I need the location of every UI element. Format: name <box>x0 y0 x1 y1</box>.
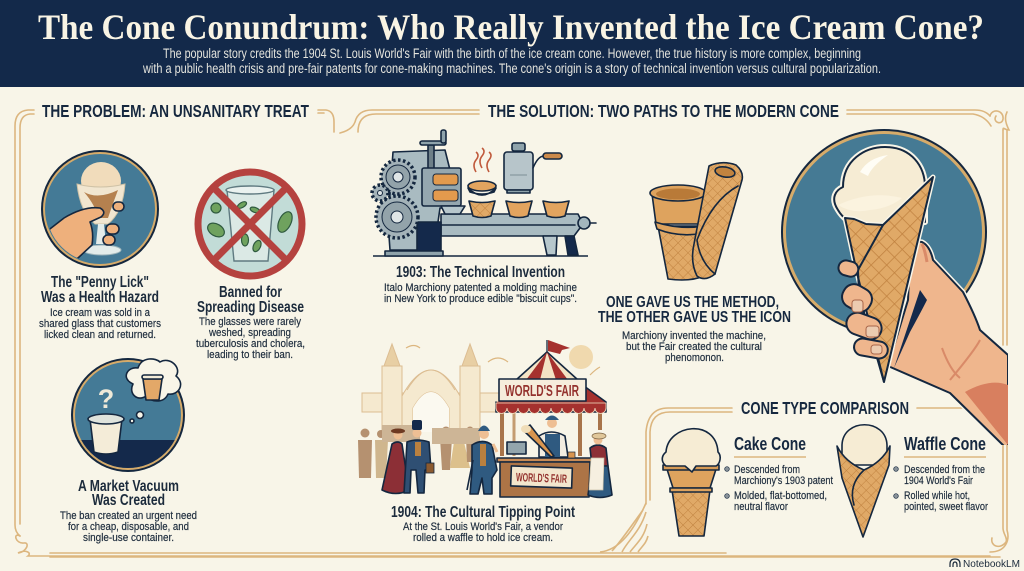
scoop <box>834 147 925 228</box>
text: waffle cone: Waffle Cone <box>904 434 986 454</box>
text: waffle cone <box>894 434 988 513</box>
text: penny lick: Was a Health Hazard <box>41 289 159 306</box>
panel: the problem <box>39 101 309 544</box>
text: penny lick: shared glass that customers <box>39 318 161 330</box>
hand back <box>902 239 966 408</box>
text: 1904 tipping point <box>391 504 575 544</box>
icon: banned germ glass <box>198 172 302 276</box>
counter sign: WORLD'S FAIR <box>516 470 567 486</box>
text: banned for spreading disease <box>196 284 305 361</box>
icon: cake cone <box>662 429 720 536</box>
cone <box>845 177 933 382</box>
text: market vacuum: single-use container. <box>83 532 174 544</box>
text: 1904 tipping point: 1904: The Cultural Tipping Point <box>391 504 575 521</box>
text: cake cone: Cake Cone <box>734 434 806 454</box>
text: 1903 invention <box>384 264 577 305</box>
text: method and icon: Marchiony invented the machine, <box>622 330 766 342</box>
text: 1903 invention: Italo Marchiony patented a molding machine <box>384 282 577 294</box>
text: banned for spreading disease: weshed, spreading <box>208 327 291 339</box>
icon: market vacuum cup and thought bubble: ? <box>98 384 114 414</box>
gate <box>362 344 500 432</box>
text: banned for spreading disease: Banned for <box>219 284 282 301</box>
text: waffle cone: Rolled while hot, <box>904 490 970 502</box>
text: 1904 tipping point: At the St. Louis World's Fair, a vendor <box>403 521 563 533</box>
icon: market vacuum cup and thought bubble <box>71 358 185 472</box>
text: penny lick: licked clean and returned. <box>44 329 156 341</box>
text: penny lick <box>39 274 161 341</box>
heading: the solution: THE SOLUTION: TWO PATHS TO THE MODERN CONE <box>488 101 839 121</box>
notebooklm badge: NotebookLM <box>963 558 1020 570</box>
text: waffle cone: Descended from the <box>904 464 985 476</box>
icon: penny lick glass in hand <box>41 150 159 268</box>
text: penny lick: The "Penny Lick" <box>51 274 149 291</box>
text: cake cone: Molded, flat-bottomed, <box>734 490 827 502</box>
heading: the problem: THE PROBLEM: AN UNSANITARY TREAT <box>42 101 309 121</box>
text: market vacuum: Was Created <box>92 492 165 509</box>
fingers <box>837 259 889 360</box>
booth <box>496 340 612 498</box>
customer woman <box>568 433 612 498</box>
counter sign <box>511 466 572 488</box>
booth sign: WORLD'S FAIR <box>505 383 579 400</box>
text: cake cone: Descended from <box>734 464 800 476</box>
text: cake cone: neutral flavor <box>734 501 788 513</box>
text: banned for spreading disease: The glasses were rarely <box>199 316 301 328</box>
heading: comparison: CONE TYPE COMPARISON <box>741 398 909 418</box>
illustration: cone molding machine <box>372 130 596 256</box>
illustration: world's fair gate and booth <box>358 340 612 498</box>
text: market vacuum: The ban created an urgent need <box>60 510 197 522</box>
illustration: hand holding waffle cone <box>781 129 1008 450</box>
text: banned for spreading disease: Spreading Disease <box>197 299 304 316</box>
text: method and icon: phenomonon. <box>665 352 724 364</box>
header band <box>0 0 1024 87</box>
intro text: The popular story credits the 1904 St. Louis World's Fair with the birth of the ice cream cone. However, the true history is more complex, beginning <box>163 46 861 61</box>
text: method and icon: ONE GAVE US THE METHOD, <box>606 294 779 311</box>
text: market vacuum <box>60 478 197 544</box>
gentleman <box>467 426 497 494</box>
text: cake cone: Marchiony's 1903 patent <box>734 475 834 487</box>
icon: molded cup and rolled waffle <box>650 163 742 280</box>
text: banned for spreading disease: tuberculosis and cholera, <box>196 338 305 350</box>
text: 1903 invention: 1903: The Technical Invention <box>396 264 565 281</box>
text: method and icon: but the Fair created the cultural <box>626 341 762 353</box>
text: 1904 tipping point: rolled a waffle to hold ice cream. <box>413 532 553 544</box>
panel: the solution <box>358 101 1008 544</box>
text: method and icon: THE OTHER GAVE US THE ICON <box>598 309 791 326</box>
text: 1903 invention: in New York to produce edible "biscuit cups". <box>384 293 577 305</box>
cups and steam <box>468 148 569 218</box>
text: method and icon <box>598 294 791 364</box>
text: cake cone <box>725 434 834 513</box>
crowd <box>358 425 480 478</box>
counter <box>497 458 592 462</box>
vendor <box>507 416 568 457</box>
text: market vacuum: A Market Vacuum <box>78 478 179 495</box>
text: market vacuum: for a cheap, disposable, and <box>68 521 189 533</box>
ornamental frame <box>15 110 1009 557</box>
icon: waffle cone <box>837 425 890 537</box>
booth sign <box>499 379 586 401</box>
couple <box>382 420 434 494</box>
pot <box>504 143 562 193</box>
ornament: shell swirl <box>600 503 648 552</box>
text: penny lick: Ice cream was sold in a <box>50 307 151 319</box>
intro text <box>142 46 881 76</box>
text: waffle cone: pointed, sweet flavor <box>904 501 988 513</box>
panel: cone type comparison <box>662 398 988 537</box>
text: waffle cone: 1904 World's Fair <box>904 475 973 487</box>
text: banned for spreading disease: leading to their ban. <box>207 349 293 361</box>
